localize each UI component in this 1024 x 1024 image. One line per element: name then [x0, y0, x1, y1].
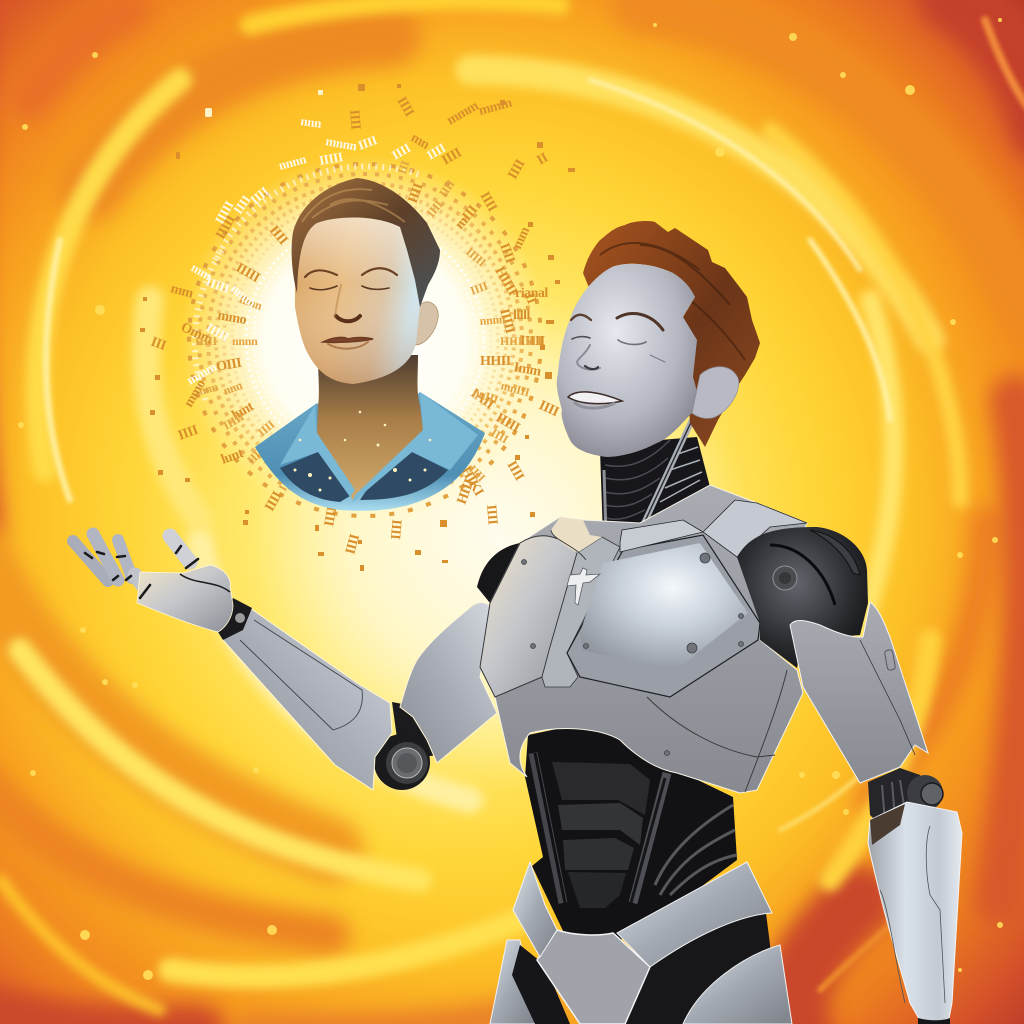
- cross pendant: [567, 568, 600, 605]
- right chest plate outer: [567, 535, 760, 697]
- robot: [73, 221, 962, 1024]
- upper arm shell: [790, 602, 928, 783]
- pale inner text ring: mnIII: [499, 378, 532, 400]
- portrait hair strands: [302, 189, 405, 222]
- central light glow: [240, 280, 760, 800]
- orange text ring: HIII: [455, 477, 477, 506]
- pale inner text ring: nnnn: [479, 312, 506, 328]
- white text fragments: IIIII: [204, 320, 232, 345]
- pale inner text ring: IIII: [244, 444, 267, 467]
- shoulder bolt: [773, 566, 797, 590]
- orange text ring: IIIII: [233, 260, 262, 286]
- floating text fragments: [140, 84, 575, 571]
- forearm shell: [868, 802, 962, 1024]
- pale inner text ring: IIIII: [463, 245, 489, 270]
- pale inner text ring: IIII: [424, 197, 446, 220]
- upper arm: [400, 603, 497, 763]
- collar right plate: [620, 520, 703, 552]
- wrist: [218, 598, 252, 640]
- orange text ring: IIII: [322, 506, 340, 528]
- portrait sparks: [294, 411, 431, 492]
- white text fragments: IIIII: [204, 274, 232, 296]
- torso seams: [551, 530, 787, 792]
- rivets: [522, 553, 744, 756]
- orange text ring: IIIII: [520, 334, 545, 349]
- orange text ring: mmo: [216, 308, 248, 328]
- abdominal plates: [552, 762, 650, 908]
- orange text ring: mm: [169, 281, 195, 302]
- elbow joint: [374, 734, 430, 790]
- orange text ring: IIII: [343, 533, 363, 556]
- face features: [571, 314, 665, 370]
- orange text ring: IIII: [346, 109, 363, 130]
- portrait ear: [415, 302, 438, 345]
- white text fragments: mnnn: [324, 133, 359, 154]
- orange text ring: IIII: [483, 504, 500, 525]
- orange text ring: mIII: [453, 203, 481, 233]
- orange text ring: mmm: [477, 95, 514, 119]
- orange text ring: IIII: [176, 423, 200, 444]
- elbow coil: [868, 768, 943, 825]
- orange text ring: IIIII: [493, 410, 522, 436]
- white text fragments: IIIII: [212, 198, 237, 226]
- finger joints: [85, 546, 198, 598]
- orange text ring: IIII: [496, 241, 517, 265]
- white text fragments: IIII: [356, 132, 379, 153]
- pale inner text ring: IIII: [275, 471, 297, 494]
- orange text ring: mmo: [181, 377, 209, 410]
- smile: [568, 392, 622, 408]
- robot torso: [480, 485, 807, 793]
- pale inner text ring: nnnn: [232, 334, 258, 348]
- orange text ring: Imm: [512, 360, 543, 380]
- orange text ring: OIII: [215, 356, 243, 375]
- pale inner text ring: IIII: [436, 177, 458, 200]
- pale inner text ring: III: [395, 158, 413, 176]
- orange text ring: III: [149, 335, 168, 354]
- robot right arm: [737, 527, 962, 1024]
- white text fragments: mmm: [184, 359, 219, 388]
- orange text ring: II: [534, 150, 551, 168]
- pale inner text ring: nnn: [221, 378, 245, 398]
- orange text ring: [149, 94, 561, 556]
- orange text ring: II: [521, 291, 539, 306]
- head ear: [692, 367, 739, 418]
- orange text ring: IIII: [389, 519, 406, 540]
- fingers: [73, 534, 190, 592]
- pale inner text ring: IIII: [466, 462, 489, 485]
- orange text ring: IIII: [477, 190, 499, 214]
- portrait hair: [292, 178, 440, 307]
- torso base: [480, 485, 807, 793]
- pale inner text ring: IIII: [453, 429, 476, 451]
- head hair: [583, 221, 760, 447]
- portrait neck: [317, 355, 423, 500]
- orange text ring: HHII: [480, 354, 511, 369]
- white text fragments: nnnn: [228, 281, 260, 311]
- orange text ring: IIII: [394, 94, 416, 119]
- pale inner text ring: IIII: [468, 278, 490, 298]
- white text fragments: IIII: [389, 140, 413, 163]
- side ribs: [655, 805, 737, 895]
- orange text ring: mn: [408, 130, 432, 153]
- robot thighs: [490, 905, 792, 1024]
- neck tube: [640, 420, 692, 532]
- white text fragments: IIII: [424, 140, 448, 163]
- pale inner text ring: nnIII: [471, 385, 501, 407]
- portrait: glowing human head: [255, 178, 485, 511]
- orange text ring: IIII: [536, 398, 561, 420]
- dissolving particle ring: [189, 164, 541, 516]
- orange text ring: HIKI: [458, 464, 486, 499]
- orange text ring: IIIII: [496, 307, 517, 335]
- right chest plate inner: [580, 543, 748, 670]
- pale inner text ring: Ilmn: [237, 292, 264, 313]
- white text fragments: mm: [188, 260, 215, 283]
- right shoulder cap: [703, 500, 807, 557]
- orange text ring: rianal: [515, 286, 548, 301]
- pale inner text ring: IIII: [255, 417, 278, 439]
- orange text ring: IIII: [406, 182, 427, 205]
- palm: [137, 565, 233, 632]
- orange text ring: lllll: [513, 308, 531, 323]
- robot pelvis and waist band: [513, 862, 772, 1024]
- orange text ring: IIII: [505, 157, 528, 182]
- robot left arm: [73, 534, 497, 790]
- side cables: [533, 753, 667, 903]
- shoulder ball: [737, 527, 868, 668]
- pale inner text ring: IIIII: [220, 409, 247, 433]
- orange text ring: IIII: [262, 489, 285, 514]
- white text fragments: nnnn: [277, 151, 309, 173]
- robot head: [557, 221, 760, 457]
- pale inner text ring: HIII: [500, 334, 523, 348]
- halo around portrait: [180, 140, 550, 540]
- hair strands: [600, 243, 745, 360]
- orange text ring: IIII: [504, 458, 526, 483]
- orange text ring: IAII: [468, 386, 496, 412]
- white text fragments: nnn: [300, 113, 323, 131]
- orange text ring: lunt: [230, 399, 257, 423]
- orange text ring: lunt: [219, 446, 246, 468]
- white text fragments: IIIII: [318, 149, 344, 168]
- orange text ring: IIII: [440, 146, 464, 168]
- orange text ring: IIII: [266, 223, 290, 248]
- pale inner text ring: IIII: [488, 425, 511, 447]
- upper chest left: [551, 517, 602, 553]
- neck ribs: [605, 440, 670, 519]
- orange text ring: IIII: [261, 438, 285, 463]
- pale inner text ring: Ill: [525, 334, 536, 348]
- robot neck: [600, 420, 710, 537]
- left chest plate: [480, 536, 577, 697]
- portrait shirt dark pattern: [280, 452, 448, 502]
- white text fragments: [184, 113, 448, 388]
- pale inner text ring: nnn: [197, 379, 220, 398]
- orange text ring: mmm: [444, 98, 482, 128]
- robot abdomen: [525, 722, 737, 940]
- portrait collar: [280, 392, 478, 503]
- head face: [557, 264, 698, 457]
- portrait shirt: [255, 392, 485, 511]
- centre strip: [542, 537, 620, 687]
- white text fragments: IIII: [247, 183, 272, 207]
- white text fragments: IIII: [230, 192, 254, 217]
- pale inner text ring: [195, 158, 536, 493]
- orange text ring: Omm: [178, 320, 215, 348]
- orange text ring: HIIII: [492, 264, 520, 298]
- pale inner text ring: IIIII: [195, 334, 217, 348]
- forearm: [223, 608, 392, 790]
- orange text ring: mm: [510, 224, 533, 252]
- portrait features: [305, 268, 397, 349]
- robot right shoulder back: [477, 543, 520, 610]
- portrait face: [295, 217, 420, 384]
- scattered fragments: [140, 84, 575, 571]
- orange text ring: IIIII: [213, 213, 239, 242]
- elbow socket: [392, 702, 438, 760]
